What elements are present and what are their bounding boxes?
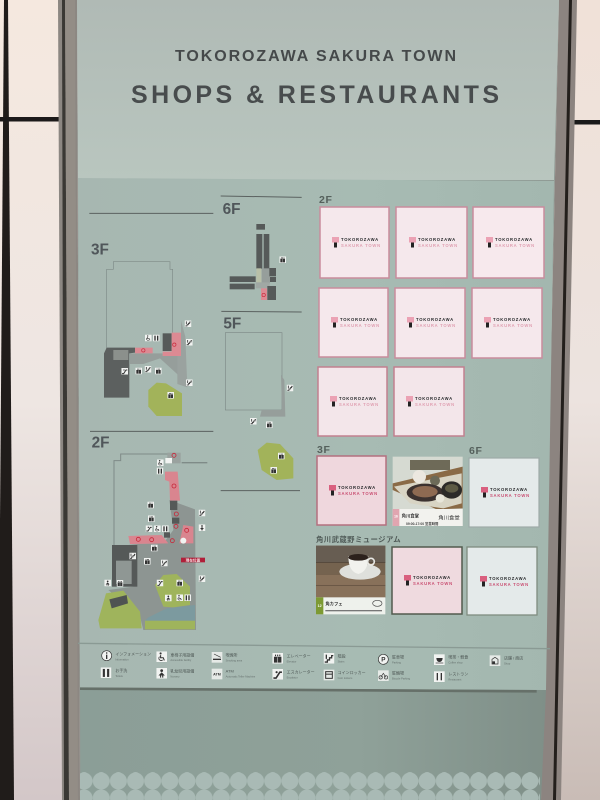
map: 2F: 2F [92, 434, 110, 451]
shop card 6F [469, 458, 539, 527]
legend: accessible: Accessible facility [170, 658, 192, 662]
map: 3F: 3F [91, 242, 109, 259]
floor maps: 3F, 6F, 5F [89, 196, 302, 428]
decorative dot band [80, 772, 540, 800]
legend: escalator: エスカレーター [287, 668, 315, 674]
shop card museum-3: SAKURA TOWN [489, 582, 529, 587]
shop card 6F: SAKURA TOWN [490, 493, 530, 498]
frame: right [541, 0, 577, 800]
card banner: 角川食堂 [438, 513, 460, 521]
shop card 2F-7: SAKURA TOWN [339, 402, 379, 407]
sign panel: lower [80, 688, 546, 800]
legend: coin lockers [324, 670, 366, 680]
shop card 2F-8: SAKURA TOWN [415, 402, 455, 407]
shop card 2F-8 [394, 367, 464, 436]
legend: nursery: 乳幼児用設備 [170, 667, 194, 673]
legend: stairs [324, 653, 346, 664]
shop card 2F-5 [395, 288, 465, 358]
shop card 2F-1: TOKOROZAWA [341, 237, 379, 242]
legend: ATM: Automatic Teller Machine [226, 675, 256, 679]
legend: accessible: 車椅子用設備 [170, 651, 194, 657]
legend: escalator [272, 668, 315, 680]
shop card museum-3 [467, 547, 537, 615]
subtitle: TOKOROZAWA SAKURA TOWN [175, 48, 456, 65]
shop card 2F-1 [320, 207, 389, 278]
legend: toilets [101, 667, 127, 678]
section label: museum: 角川武蔵野ミュージアム [316, 535, 401, 544]
legend: parking: Parking [392, 660, 402, 664]
legend: bicycle parking: 駐輪場 [392, 669, 404, 675]
legend: elevator: エレベーター [287, 652, 311, 658]
card banner: 角カフェ [325, 601, 343, 608]
map: 6F [221, 196, 302, 300]
floor label: 6F shops: 6F [469, 445, 482, 457]
shop card 3F: TOKOROZAWA [338, 485, 376, 490]
map: 6F: 6F [223, 201, 241, 218]
legend: shop [490, 654, 523, 666]
card banner: 16 [394, 514, 398, 518]
legend: nursery [156, 667, 194, 679]
legend: restaurant [434, 670, 468, 682]
sign panel: upper [77, 0, 559, 180]
shop card 2F-3: SAKURA TOWN [495, 243, 535, 248]
shop card 2F-8: TOKOROZAWA [415, 396, 453, 401]
floor label: 3F shops: 3F [317, 444, 330, 456]
heading: SHOPS & RESTAURANTS [131, 81, 499, 109]
shop card 2F-3 [473, 207, 544, 278]
shop card 2F-4 [319, 288, 388, 357]
shop card 2F-5: TOKOROZAWA [416, 317, 454, 322]
card banner [316, 597, 385, 614]
legend: ATM: ATM [226, 669, 234, 674]
legend: smoking [212, 651, 243, 663]
card banner: 09:00-17:00 営業時間 [406, 521, 439, 526]
wall: right [541, 0, 600, 800]
shop card 2F-1: SAKURA TOWN [341, 243, 381, 248]
wall: left [0, 0, 80, 800]
legend: coin lockers: Coin lockers [338, 676, 353, 680]
shop card museum-2: TOKOROZAWA [413, 575, 451, 580]
shop card 2F-6: SAKURA TOWN [493, 323, 533, 328]
legend: coin lockers: コインロッカー [338, 670, 366, 675]
legend: toilets: Toilets [115, 674, 124, 678]
legend: nursery: Nursery [170, 674, 180, 678]
shop card 2F-2 [396, 207, 467, 278]
shop card 3F: SAKURA TOWN [338, 491, 378, 496]
floor map: 2F and 5F garden [90, 431, 300, 630]
title block [131, 48, 499, 109]
legend: bicycle parking [378, 669, 411, 681]
legend: smoking: Smoking area [226, 658, 243, 662]
legend: coffee shop: Coffee shop [448, 660, 463, 664]
map: 3F [89, 213, 213, 416]
legend: restaurant: レストラン [448, 670, 468, 676]
map: 5F [221, 311, 302, 428]
shop card 2F-6 [472, 288, 542, 358]
legend: information: インフォメーション [115, 652, 151, 657]
sign panel: map area [78, 178, 554, 690]
card banner [393, 509, 463, 526]
legend: shop: Shop [504, 661, 511, 665]
legend: ATM: ATM [213, 672, 221, 676]
legend: bicycle parking: Bicycle Parking [392, 676, 411, 680]
legend: stairs: 階段 [338, 653, 346, 659]
legend: ATM [212, 669, 256, 679]
card banner: 角川食堂 [402, 512, 420, 519]
legend: elevator [272, 652, 311, 664]
shop card 3F [317, 456, 386, 525]
shop card 2F-2: SAKURA TOWN [418, 243, 458, 248]
legend: parking: P [381, 657, 385, 664]
shop card 2F-6: TOKOROZAWA [493, 317, 531, 322]
photo card: cafe [316, 546, 385, 614]
legend: toilets: お手洗 [115, 667, 127, 673]
legend [78, 643, 550, 693]
legend: parking [378, 653, 404, 664]
legend: accessible [156, 651, 194, 662]
shop card 2F-4: SAKURA TOWN [340, 323, 380, 328]
shop card 2F-5: SAKURA TOWN [416, 323, 456, 328]
shop card 2F-4: TOKOROZAWA [340, 317, 378, 322]
legend: escalator: Escalator [287, 675, 298, 679]
legend: information: Information [115, 657, 129, 661]
shop card museum-2: SAKURA TOWN [413, 581, 453, 586]
frame: left [58, 0, 80, 800]
photo card: restaurant [393, 457, 463, 526]
shop card 6F: TOKOROZAWA [490, 487, 528, 492]
legend: elevator: Elevator [287, 659, 297, 663]
legend: coffee shop [434, 653, 468, 665]
floor label: 2F shops: 2F [319, 194, 332, 206]
legend: shop: 店舗 / 商店 [504, 654, 523, 660]
shop card museum-3: TOKOROZAWA [489, 576, 527, 581]
shop card 2F-3: TOKOROZAWA [495, 237, 533, 242]
shop card 2F-7: TOKOROZAWA [339, 396, 377, 401]
shop card 2F-2: TOKOROZAWA [418, 237, 456, 242]
shop card museum-2 [392, 547, 462, 614]
map: 2F [90, 431, 213, 630]
legend: stairs: Stairs [338, 660, 345, 664]
map: 5F garden [221, 443, 300, 491]
shop card 2F-7 [318, 367, 387, 436]
card banner: 12 [318, 604, 322, 608]
legend: smoking: 喫煙所 [226, 651, 238, 657]
legend: coffee shop: 喫茶・軽食 [448, 653, 468, 659]
legend: parking: 駐車場 [392, 653, 404, 659]
map: 5F: 5F [223, 315, 241, 332]
legend: restaurant: Restaurant [448, 677, 462, 681]
legend: information [102, 651, 151, 661]
map: 2F: 現在位置 [186, 557, 201, 562]
